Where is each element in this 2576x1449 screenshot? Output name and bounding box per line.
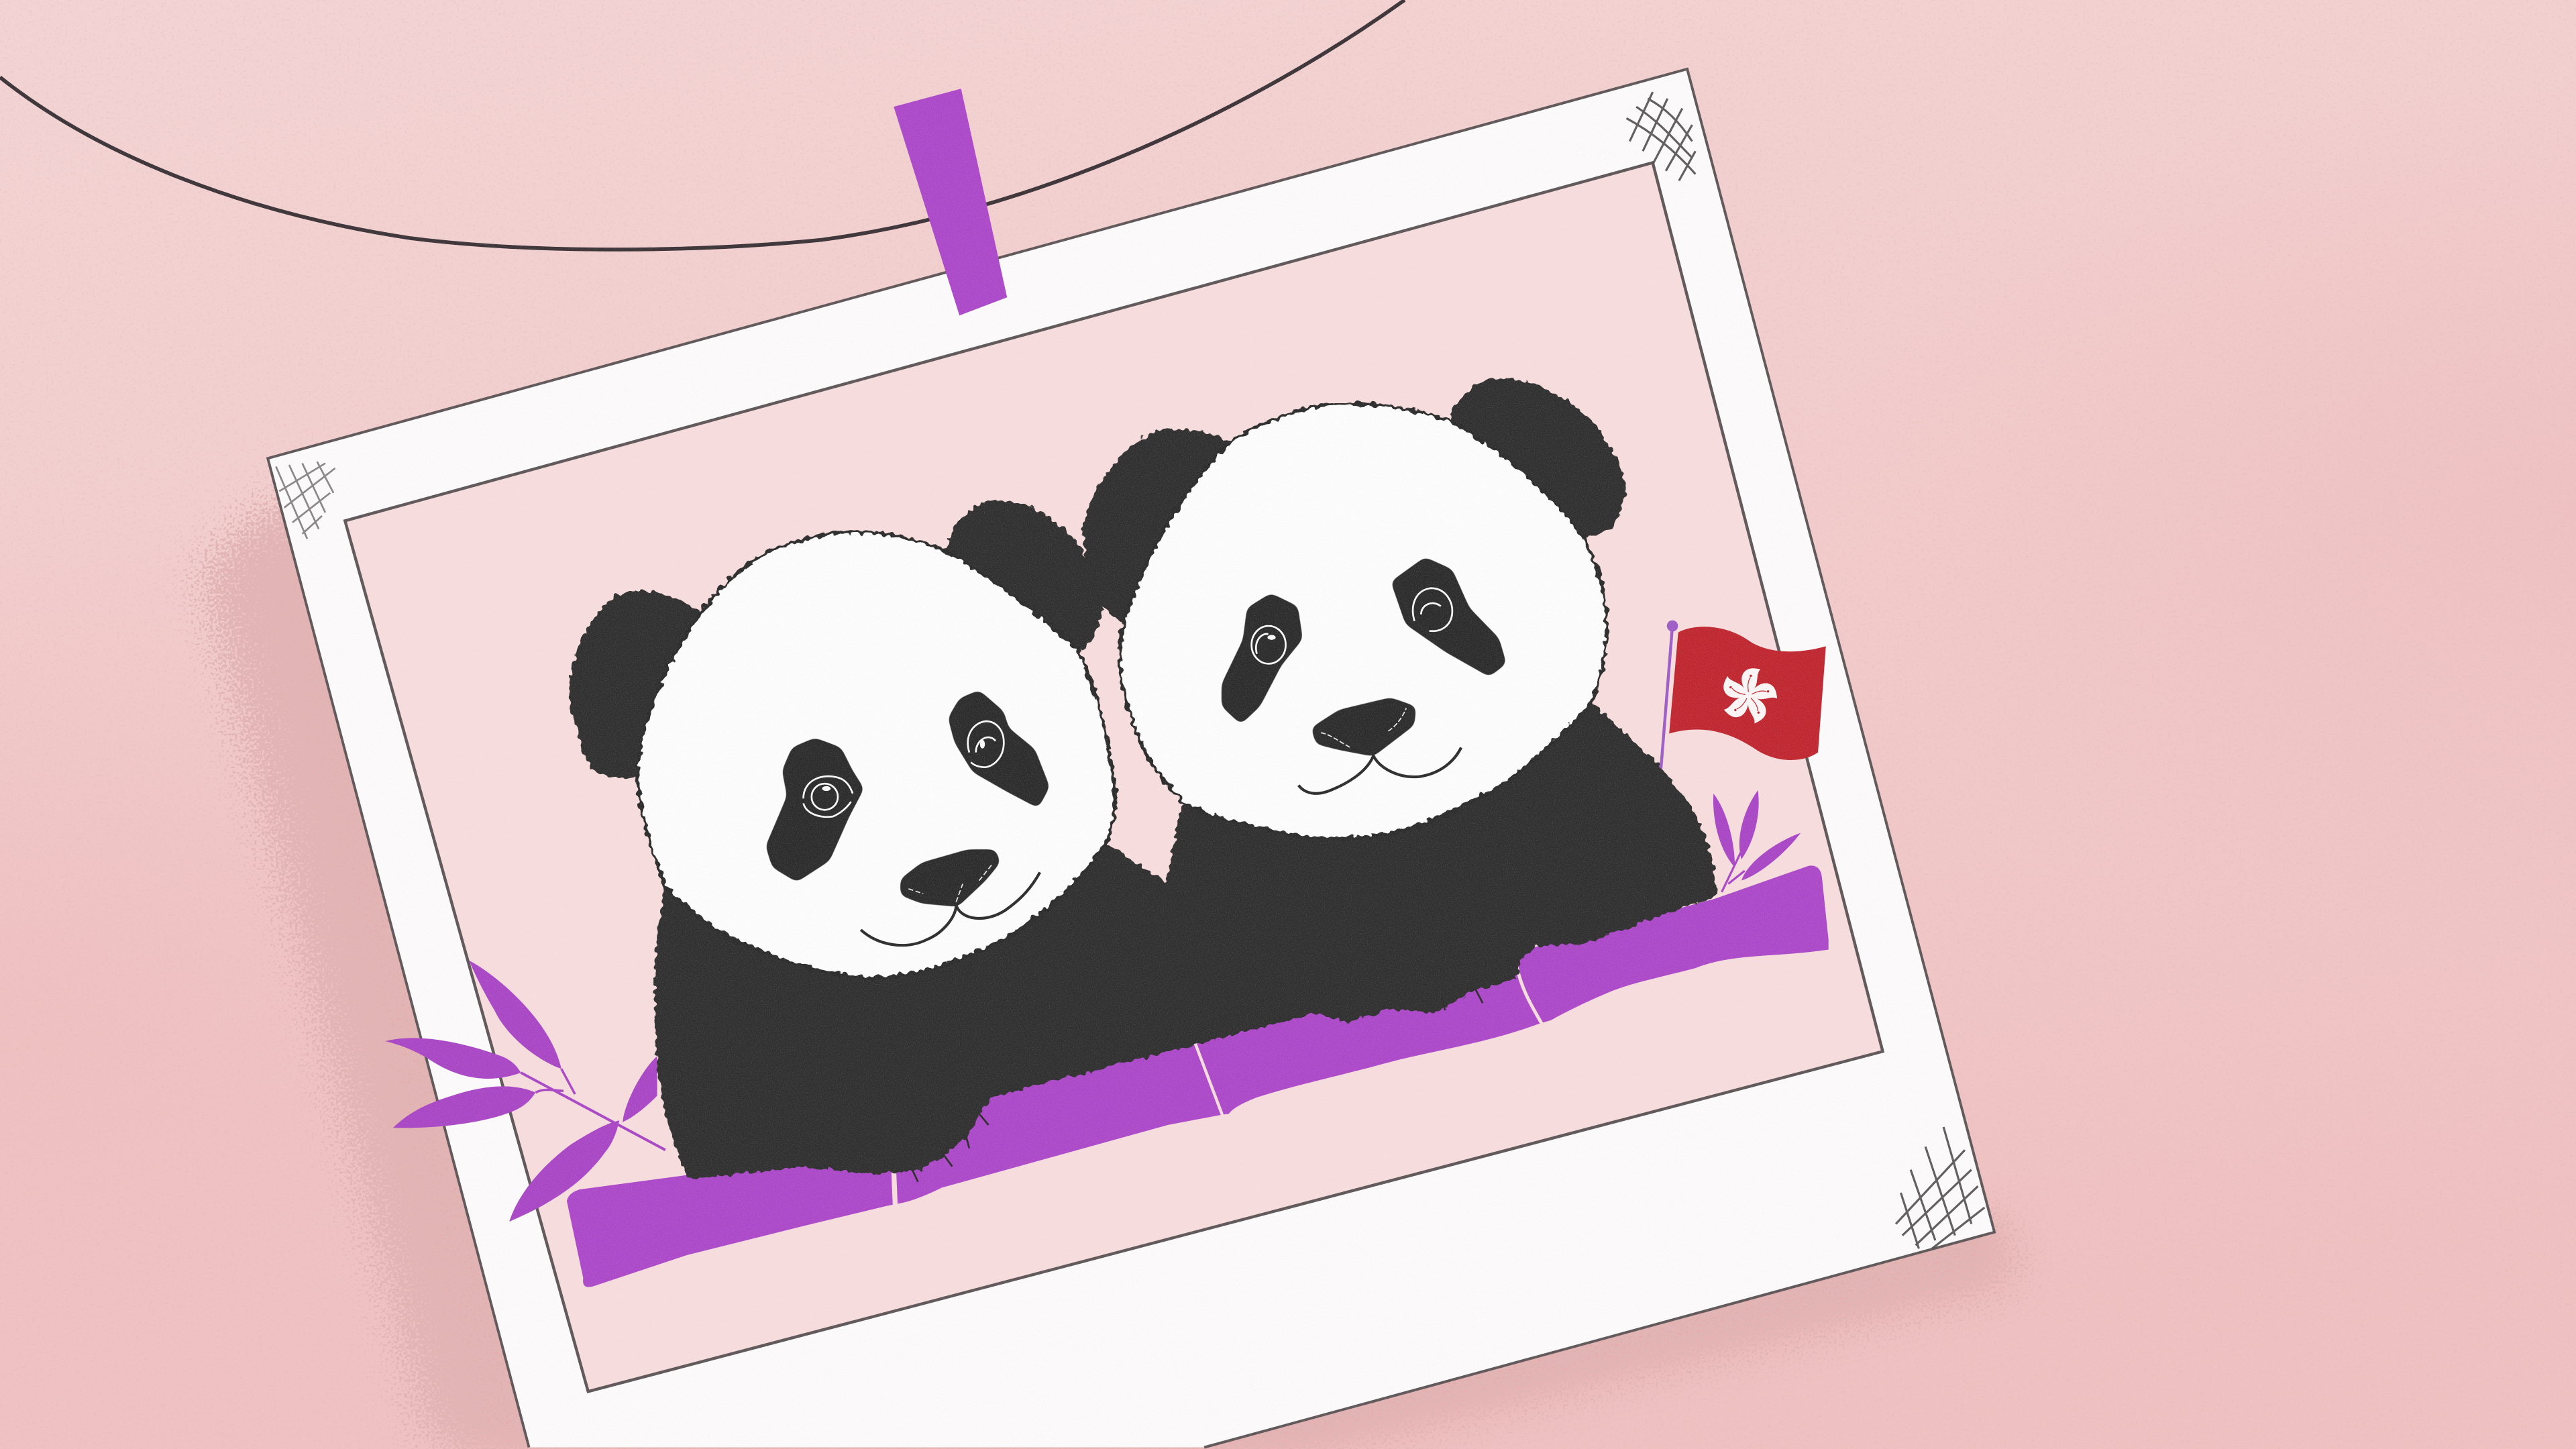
left panda eye patches (765, 690, 1050, 882)
right panda face (1222, 557, 1507, 794)
left panda nose highlights (908, 864, 992, 902)
panda bodies and ears (570, 378, 1717, 1179)
bamboo (567, 865, 1829, 1287)
polaroid soft shadow (246, 526, 2008, 1448)
string (0, 0, 1405, 250)
pandas (570, 378, 1717, 1182)
polaroid grainy shadow (201, 493, 2017, 1448)
left panda mouth (861, 872, 1040, 945)
bauhinia (1719, 666, 1777, 724)
panda claws (911, 989, 1483, 1182)
polaroid frame (268, 69, 1994, 1448)
corner hatch: bottom right (1896, 1127, 1984, 1248)
corner hatch: top right (1626, 92, 1695, 180)
right panda nose highlights (1321, 708, 1406, 747)
right bamboo leaves (1713, 790, 1801, 892)
clothes peg (894, 89, 1007, 315)
left panda head (637, 532, 1115, 978)
photo window (345, 162, 1883, 1391)
ears (570, 591, 739, 778)
right panda head (1120, 403, 1607, 839)
left bamboo leaves (385, 961, 665, 1222)
Hong Kong flag (1669, 627, 1826, 760)
left panda eyes (804, 721, 1004, 817)
bamboo joints (894, 963, 1543, 1209)
right panda nose (1311, 698, 1416, 757)
flag pole (1661, 621, 1678, 769)
right panda mouth (1299, 747, 1461, 794)
corner hatch: top left (276, 462, 335, 539)
frame edge (268, 69, 1994, 1448)
left panda face (765, 690, 1050, 945)
right panda eye patches (1222, 557, 1507, 724)
right panda eyes (1252, 588, 1452, 663)
left panda nose (900, 849, 1000, 907)
